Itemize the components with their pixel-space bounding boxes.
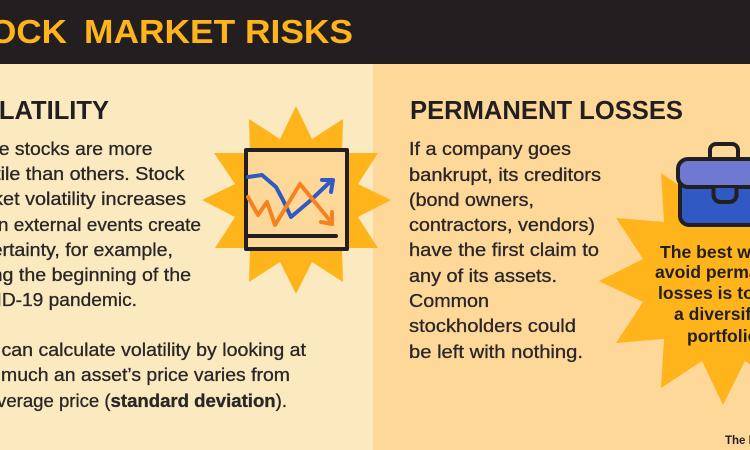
- title bar: [0, 0, 750, 64]
- callout: starburst with diversification advice: [599, 157, 750, 405]
- heading: permanent losses: PERMANENT LOSSES: [410, 95, 683, 125]
- text block: permanent losses description: Common: [409, 290, 489, 311]
- text block: permanent losses description: bankrupt, its creditors: [409, 164, 601, 185]
- text block: permanent losses description: contractors, vendors): [409, 214, 595, 235]
- text block: permanent losses description: If a company goes: [409, 138, 571, 159]
- text block: permanent losses description: any of its assets.: [409, 265, 557, 286]
- text block: permanent losses description: [409, 138, 601, 362]
- title bar: MARKET RISKS: [84, 14, 353, 51]
- panel: volatility background: [0, 64, 373, 450]
- text block: permanent losses description: be left with nothing.: [409, 341, 583, 362]
- text block: permanent losses description: have the first claim to: [409, 239, 599, 260]
- icon: briefcase: [678, 144, 750, 225]
- panel: permanent losses background: [373, 64, 750, 450]
- text block: permanent losses description: stockholders could: [409, 315, 576, 336]
- icon: line chart on starburst: [202, 106, 391, 294]
- text block: volatility description: [0, 138, 306, 411]
- text block: permanent losses description: (bond owners,: [409, 189, 534, 210]
